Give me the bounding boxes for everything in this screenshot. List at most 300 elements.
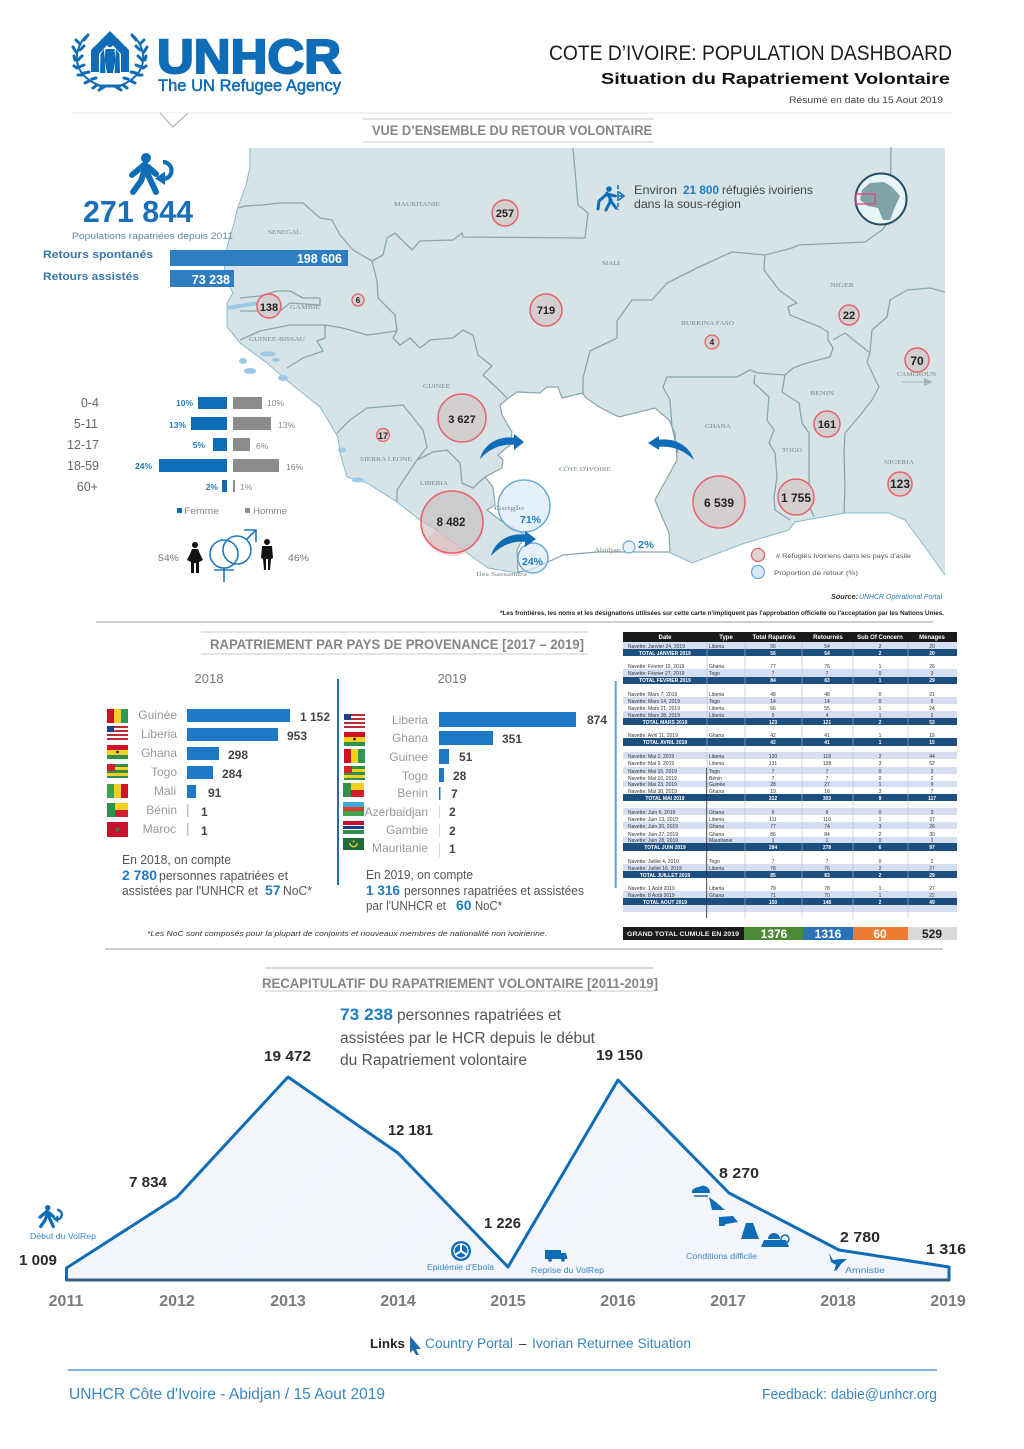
values 2019: 874: [587, 713, 607, 727]
bubble: Mali 719: 719: [537, 305, 555, 317]
text: total assisted: personnes rapatriées et: [397, 1007, 562, 1024]
table column separators: [707, 642, 908, 919]
value labels: 1 316: [926, 1241, 966, 1258]
table row stripes: [623, 642, 957, 912]
chart area: [66, 1077, 949, 1280]
icon: chevron: [160, 113, 188, 127]
table body text: Navette: Mai 30, 2019: [628, 789, 677, 795]
inset: Africa locator globe: [856, 174, 906, 224]
female percentages: 2%: [206, 482, 218, 492]
summary 2018: En 2018, on compte: [122, 853, 231, 867]
headline stat: total returns: [72, 153, 233, 242]
table body text: 6: [879, 845, 882, 851]
table body text: 29: [929, 678, 935, 684]
country names 2019: Liberia: [392, 713, 428, 727]
table body text: 7: [772, 769, 775, 775]
table body text: 15: [929, 733, 935, 739]
table body text: 53: [929, 720, 935, 726]
summary 2019: par l'UNHCR et: [366, 899, 446, 913]
header: UNHCR logo: [73, 31, 342, 95]
table body text: 76: [824, 664, 830, 670]
year label 2018: 2018: [195, 671, 223, 686]
bubble: Benin 161: [814, 411, 840, 437]
table body text: Liberia: [709, 761, 724, 767]
map legend: Proportion de retour (%): [774, 570, 858, 577]
icon: woman: [187, 542, 203, 573]
table body text: 7: [826, 776, 829, 782]
summary 2018: 57: [265, 882, 281, 898]
bar chart: return types: 73 238: [192, 273, 230, 287]
table body text: 49: [929, 900, 935, 906]
map: country labels: CÔTE D'IVOIRE: [559, 465, 611, 473]
country names 2018: Guinée: [138, 708, 177, 722]
table body text: Navette: Juillet 4, 2019: [628, 859, 679, 865]
table header: Ménages: [919, 635, 945, 641]
links: [370, 1336, 691, 1355]
table body text: 1: [879, 678, 882, 684]
table body text: Navette: Mai 15, 2019: [628, 769, 677, 775]
table grand total: 529: [922, 927, 942, 941]
age labels: 12-17: [67, 438, 99, 452]
table: 2019 returns by convoy: [623, 632, 957, 941]
table body text: 3: [879, 789, 882, 795]
male percentages: 10%: [267, 398, 284, 408]
table body text: Navette: Mars 14, 2019: [628, 699, 680, 705]
table body text: 14: [770, 699, 776, 705]
table body text: 128: [823, 761, 831, 767]
bubble: return 71%: [494, 480, 550, 532]
map: country labels: Iles Sassandra: [476, 572, 527, 578]
summary 2018: personnes rapatriées et: [159, 869, 289, 883]
map: country labels: Abidjan: [594, 548, 621, 554]
male percentages: 6%: [256, 441, 269, 451]
values 2019: 51: [459, 750, 473, 764]
table header: Retournés: [813, 635, 843, 641]
summary 2019: personnes rapatriées et assistées: [404, 884, 584, 898]
callout: refugees in sub-region: Environ: [634, 183, 677, 197]
country names 2019: Azerbaidjan: [365, 805, 428, 819]
table header: Type: [719, 635, 733, 641]
table body text: 20: [929, 651, 935, 657]
table body text: 78: [770, 866, 776, 872]
year axis: 2016: [600, 1293, 636, 1310]
table body text: 22: [929, 893, 935, 899]
table body text: 111: [769, 817, 777, 823]
table body text: 19: [770, 789, 776, 795]
table body text: 84: [824, 832, 830, 838]
map: country labels: NIGER: [830, 283, 854, 289]
values 2018: 1: [201, 805, 208, 819]
gender split: 54%: [158, 553, 179, 563]
bubble: Niger 22: 22: [843, 310, 855, 322]
icon: walking returnee: [132, 153, 172, 192]
map: West Africa: [224, 147, 945, 578]
table body text: TOTAL AVRIL 2019: [643, 740, 687, 746]
values 2018: [201, 710, 330, 838]
table body text: Navette: Juin 28, 2019: [628, 838, 678, 844]
table body text: 312: [769, 796, 777, 802]
table body text: 123: [769, 720, 777, 726]
table body text: 9: [772, 810, 775, 816]
table body text: Ghana: [709, 810, 724, 816]
links: Links: [370, 1336, 405, 1351]
flags 2019: [343, 714, 365, 850]
table body text: TOTAL JUILLET 2019: [640, 873, 690, 879]
year axis: [49, 1293, 966, 1310]
table body text: 0: [879, 769, 882, 775]
map: Gambia river: [228, 303, 262, 308]
gender split: 46%: [288, 553, 309, 563]
country names 2018: Liberia: [141, 727, 177, 741]
country names 2019: Ghana: [392, 731, 428, 745]
bubble: Sierra Leone 17: 17: [378, 431, 388, 441]
summary 2018: assistées par l'UNHCR et: [122, 884, 258, 898]
text: total assisted: du Rapatriement volontaire: [340, 1052, 527, 1069]
logo wordmark: UNHCR: [157, 31, 341, 84]
summary 2019: 60: [456, 897, 472, 913]
table body text: 27: [824, 782, 830, 788]
pyramid legend: Homme: [253, 506, 287, 517]
bubble: return 2%: [623, 540, 654, 553]
table body text: 2: [931, 776, 934, 782]
country names 2019: Togo: [402, 769, 428, 783]
table body text: 1: [879, 740, 882, 746]
map: Côte d'Ivoire: [485, 387, 677, 572]
panel: 2018 by country: [107, 671, 330, 898]
table body text: 0: [879, 699, 882, 705]
bubble: Burkina Faso 4: 4: [710, 338, 715, 347]
country names 2018: Bénin: [146, 803, 177, 817]
bubble: Guinee 3627: 3 627: [448, 414, 476, 426]
table body text: Togo: [709, 671, 720, 677]
bar chart: return types: Retours assistés: [43, 271, 139, 283]
table body text: 1: [879, 886, 882, 892]
table body text: Togo: [709, 859, 720, 865]
event: start of VolRep: [30, 1205, 97, 1241]
values 2019: [449, 713, 607, 856]
table body text: 2: [931, 713, 934, 719]
table body text: 42: [770, 733, 776, 739]
table body text: 24: [929, 706, 935, 712]
summary 2018: 2 780: [122, 867, 157, 883]
map: country labels: TOGO: [782, 448, 803, 454]
table body text: 52: [929, 761, 935, 767]
map: country labels: MALI: [602, 261, 620, 267]
values 2019: 2: [449, 824, 456, 838]
table body text: 3: [931, 671, 934, 677]
table body text: Navette: Janvier 24, 2019: [628, 644, 685, 650]
value labels: 2 780: [840, 1229, 880, 1246]
table grand total: [623, 927, 957, 941]
table body text: TOTAL MARS 2019: [643, 720, 688, 726]
year axis: 2019: [930, 1293, 966, 1310]
table body text: 1: [879, 706, 882, 712]
text: total assisted: assistées par le HCR depuis le début: [340, 1030, 596, 1047]
value labels: 12 181: [388, 1122, 433, 1139]
table body text: Liberia: [709, 886, 724, 892]
table body text: 83: [824, 678, 830, 684]
values 2019: 2: [449, 805, 456, 819]
table body text: Navette: Mars 21, 2019: [628, 706, 680, 712]
bubble: Niger 22: [839, 305, 859, 325]
table body text: 284: [769, 845, 777, 851]
values 2019: 28: [453, 769, 467, 783]
table body text: 120: [769, 754, 777, 760]
table body text: 2: [879, 644, 882, 650]
bubble: Sierra Leone 17: [376, 428, 390, 442]
table body text: 41: [824, 740, 830, 746]
table body text: 2: [879, 754, 882, 760]
map: country borders: [238, 147, 945, 520]
arrow: Guinea to Cote d'Ivoire: [480, 434, 524, 459]
year axis: 2013: [270, 1293, 306, 1310]
country names 2018: Ghana: [141, 746, 177, 760]
female percentages: 10%: [176, 398, 193, 408]
table body text: Togo: [709, 699, 720, 705]
table body text: 2: [879, 866, 882, 872]
value labels: 1 226: [484, 1215, 521, 1232]
table body text: 2: [879, 900, 882, 906]
table body text: Bénin: [709, 776, 722, 782]
country names 2019: Gambie: [386, 823, 428, 837]
table body text: 3: [931, 810, 934, 816]
table body text: 97: [929, 845, 935, 851]
bar chart: return types: 198 606: [297, 252, 342, 266]
table body text: 56: [770, 706, 776, 712]
table body text: 70: [824, 893, 830, 899]
map coastline: [224, 148, 945, 575]
table body text: 54: [824, 651, 830, 657]
table body text: Navette: Mai 2, 2019: [628, 754, 674, 760]
summary 2019: En 2019, on compte: [366, 868, 473, 882]
country names 2018: Togo: [151, 765, 177, 779]
male bars: [233, 397, 279, 492]
table body text: 2: [931, 859, 934, 865]
headline caption: Populations rapatriées depuis 2011: [72, 231, 233, 242]
table body text: Liberia: [709, 692, 724, 698]
table body text: 148: [823, 900, 831, 906]
bubble: Senegal 6: 6: [356, 296, 361, 305]
arrow: to Cameroon: [902, 378, 933, 386]
table body text: 85: [770, 873, 776, 879]
map: country labels: [249, 202, 937, 578]
age labels: [67, 396, 99, 494]
table month totals: [623, 649, 957, 905]
table body text: 2: [879, 720, 882, 726]
table body text: 20: [929, 644, 935, 650]
value labels: 19 472: [264, 1048, 311, 1065]
bubble: Burkina Faso 4: [705, 335, 719, 349]
icon: refugee crossing border: [598, 185, 624, 210]
event: Ebola epidemic: Epidémie d'Ebola: [427, 1263, 495, 1272]
table body text: 26: [929, 664, 935, 670]
female percentages: [135, 398, 218, 492]
female bars: [159, 397, 227, 492]
bars 2019: [439, 712, 576, 857]
table body text: 1: [826, 838, 829, 844]
bar chart: return types: [43, 249, 348, 287]
table body text: 48: [770, 692, 776, 698]
flags 2018: [107, 709, 128, 837]
table body text: Navette: Mai 16, 2019: [628, 776, 677, 782]
bubble: return 24%: [518, 543, 548, 573]
table body text: 0: [879, 838, 882, 844]
table body text: Navette: Mars 28, 2019: [628, 713, 680, 719]
arrow: Liberia to Cote d'Ivoire: [491, 531, 536, 556]
country names 2019: [365, 713, 428, 855]
callout: refugees in sub-region: dans la sous-région: [634, 197, 741, 211]
table body text: Navette: Mai 23, 2019: [628, 782, 677, 788]
table grand total: 1376: [761, 927, 788, 941]
map: country labels: BURKINA FASO: [681, 321, 735, 327]
table body text: 6: [931, 699, 934, 705]
table body text: 278: [823, 845, 831, 851]
summary 2018: NoC*: [283, 884, 312, 898]
bubble: Togo 1755: 1 755: [781, 491, 811, 505]
table body text: 14: [824, 699, 830, 705]
table body text: 79: [770, 886, 776, 892]
values 2018: 1: [201, 824, 208, 838]
event: VolRep resumed: [531, 1250, 605, 1275]
table body text: 1: [879, 817, 882, 823]
table body text: 1: [879, 733, 882, 739]
table body text: Ghana: [709, 789, 724, 795]
table body text: Navette: Juin 27, 2019: [628, 832, 678, 838]
map source: Source:: [831, 594, 858, 601]
table grand total: 60: [873, 927, 887, 941]
table body text: 27: [929, 886, 935, 892]
country names 2018: Mali: [154, 784, 176, 798]
bubble: Guinee 3627: [438, 394, 486, 442]
table body text: 7: [826, 671, 829, 677]
table body text: 74: [824, 824, 830, 830]
map: country labels: MAURITANIE: [394, 202, 440, 208]
table body text: 0: [879, 671, 882, 677]
table body text: TOTAL JANVIER 2019: [639, 651, 691, 657]
year axis: 2011: [49, 1293, 83, 1310]
table body text: 44: [929, 754, 935, 760]
event: amnesty: Amnistie: [845, 1266, 886, 1275]
title: COTE D’IVOIRE: POPULATION DASHBOARD: [549, 42, 952, 65]
value labels: 19 150: [596, 1047, 643, 1064]
table body text: TOTAL FEVRIER 2019: [639, 678, 691, 684]
values 2018: 298: [228, 748, 248, 762]
table body text: 5: [772, 713, 775, 719]
table body text: Guinée: [709, 782, 725, 788]
headline number: 271 844: [83, 194, 194, 229]
table body text: 117: [928, 796, 936, 802]
arrow: Ghana to Cote d'Ivoire: [648, 436, 694, 460]
bubble: return 2%: 2%: [638, 540, 654, 551]
map: country labels: GHANA: [705, 424, 732, 430]
table body text: Navette: Mai 9, 2019: [628, 761, 674, 767]
area chart: yearly repatriation 2011-2019: [19, 1047, 966, 1310]
age labels: 60+: [77, 480, 98, 494]
table body text: Togo: [709, 769, 720, 775]
table body text: 56: [770, 644, 776, 650]
map source: UNHCR Operational Portal: [859, 594, 942, 601]
gender split: [158, 530, 309, 582]
table body text: Ghana: [709, 664, 724, 670]
icon: cursor: [410, 1336, 421, 1355]
table body text: 2: [879, 651, 882, 657]
table body text: [628, 644, 936, 906]
summary 2018: [122, 853, 312, 898]
table body text: Liberia: [709, 644, 724, 650]
pyramid legend: Femme: [184, 506, 219, 517]
bubble: Senegal 6: [352, 294, 364, 306]
table body text: 121: [823, 720, 831, 726]
table body text: 28: [770, 782, 776, 788]
table body text: 7: [772, 671, 775, 677]
map: country labels: SIERRA LEONE: [360, 457, 412, 463]
table body text: Navette: Avril 11, 2019: [628, 733, 678, 739]
table body text: Navette: Février 12, 2019: [628, 664, 685, 670]
summary 2019: NoC*: [475, 899, 502, 913]
map: country labels: GAMBIE: [290, 305, 320, 311]
year axis: 2012: [159, 1293, 195, 1310]
bar chart: return types: Retours spontanés: [43, 249, 153, 261]
bubble: Gambie 138: 138: [260, 302, 278, 314]
country names 2018: Maroc: [143, 822, 176, 836]
table body text: 131: [769, 761, 777, 767]
table body text: 150: [769, 900, 777, 906]
table body text: Ghana: [709, 893, 724, 899]
table body text: 77: [770, 664, 776, 670]
table header: [623, 632, 957, 642]
values 2018: 953: [287, 729, 307, 743]
bubble: Liberia 8482: [421, 491, 483, 556]
links: Ivorian Returnee Situation: [532, 1336, 691, 1351]
table body text: 9: [879, 796, 882, 802]
bubble: Benin 161: 161: [818, 419, 836, 431]
bubble: Mauritanie 257: [492, 200, 518, 226]
table body text: Liberia: [709, 706, 724, 712]
table body text: Navette: Février 27, 2019: [628, 671, 685, 677]
bubble: Cameroun 70: 70: [910, 354, 924, 368]
table body text: 1: [931, 838, 934, 844]
values 2018: 91: [208, 786, 222, 800]
bubble: Mali 719: [530, 294, 562, 326]
year axis: 2017: [710, 1293, 746, 1310]
female percentages: 24%: [135, 461, 152, 471]
table body text: Ghana: [709, 832, 724, 838]
table body text: Navette: Juin 13, 2019: [628, 817, 678, 823]
table body text: Liberia: [709, 754, 724, 760]
bubble: Mauritanie 257: 257: [496, 208, 514, 220]
bubble: Togo 1755: [778, 479, 814, 515]
map: country labels: LIBERIA: [420, 481, 449, 487]
table body text: 76: [824, 866, 830, 872]
table body text: 7: [931, 789, 934, 795]
icon: UNHCR emblem: [73, 31, 147, 90]
table body text: 54: [824, 644, 830, 650]
table body text: 7: [772, 776, 775, 782]
table body text: 21: [929, 692, 935, 698]
table grand total: GRAND TOTAL CUMULE EN 2019: [627, 931, 739, 938]
table body text: Navette: Juin 6, 2019: [628, 810, 675, 816]
country names 2019: Guinee: [389, 750, 428, 764]
table body text: 110: [823, 817, 831, 823]
links: –: [519, 1336, 527, 1351]
pyramid legend: [177, 506, 287, 517]
year axis: 2018: [820, 1293, 856, 1310]
table body text: 7: [826, 859, 829, 865]
table body text: 86: [770, 832, 776, 838]
values 2018: 284: [222, 767, 242, 781]
summary 2019: 1 316: [366, 882, 400, 898]
map: country labels: CAMEROUN: [897, 372, 937, 378]
